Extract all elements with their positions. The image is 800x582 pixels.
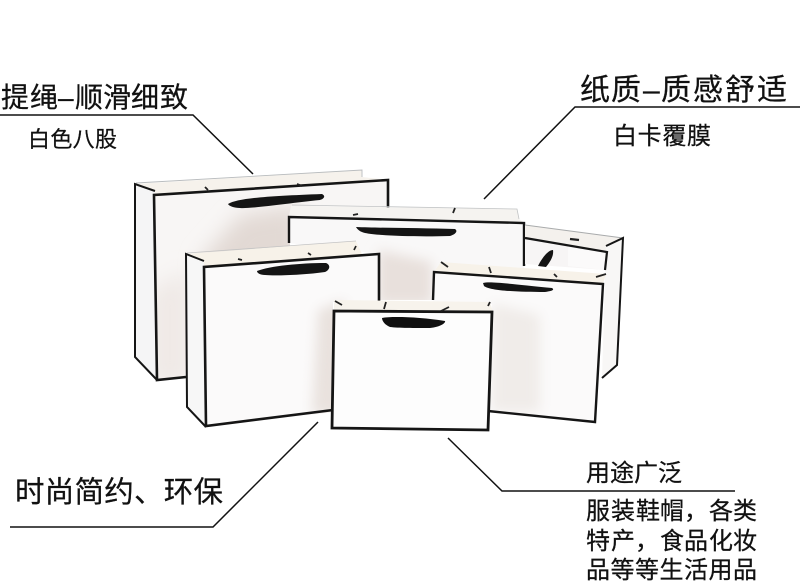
callout: rope handle [0,82,253,174]
leader line: uses [448,438,735,491]
callout: uses [448,438,757,582]
text: rope colour: 白色八股 [28,127,117,152]
handle: right bag loop [538,250,553,267]
handle: large bag ribbon [228,194,324,208]
text: paper type: 白卡覆膜 [613,123,711,150]
callout: simple style [10,422,318,527]
bag: middle right [433,262,606,422]
handle: center bag ribbon [356,227,456,236]
heading: rope: 提绳–顺滑细致 [1,82,188,113]
text: uses list [586,498,757,582]
bag group: white paper bags [135,170,623,430]
heading: paper: 纸质–质感舒适 [580,74,787,107]
leader line: paper [484,107,800,199]
handle: middle right ribbon [483,282,553,292]
bag: right back [525,225,623,378]
handle: front bag ribbon [382,317,445,328]
bag: center back [289,205,526,304]
callout: paper [484,74,800,199]
text: uses list: 服装鞋帽，各类 [586,498,757,525]
bag: large back left [135,170,388,385]
bag: middle left [186,241,379,427]
leader line: rope [0,115,253,174]
bag: front center [332,300,493,430]
text: uses list: 特产，食品化妆 [586,528,757,555]
heading: style: 时尚简约、环保 [15,476,223,509]
handle: middle left ribbon [257,263,329,275]
heading: uses: 用途广泛 [586,460,682,487]
leader line: style [10,422,318,527]
